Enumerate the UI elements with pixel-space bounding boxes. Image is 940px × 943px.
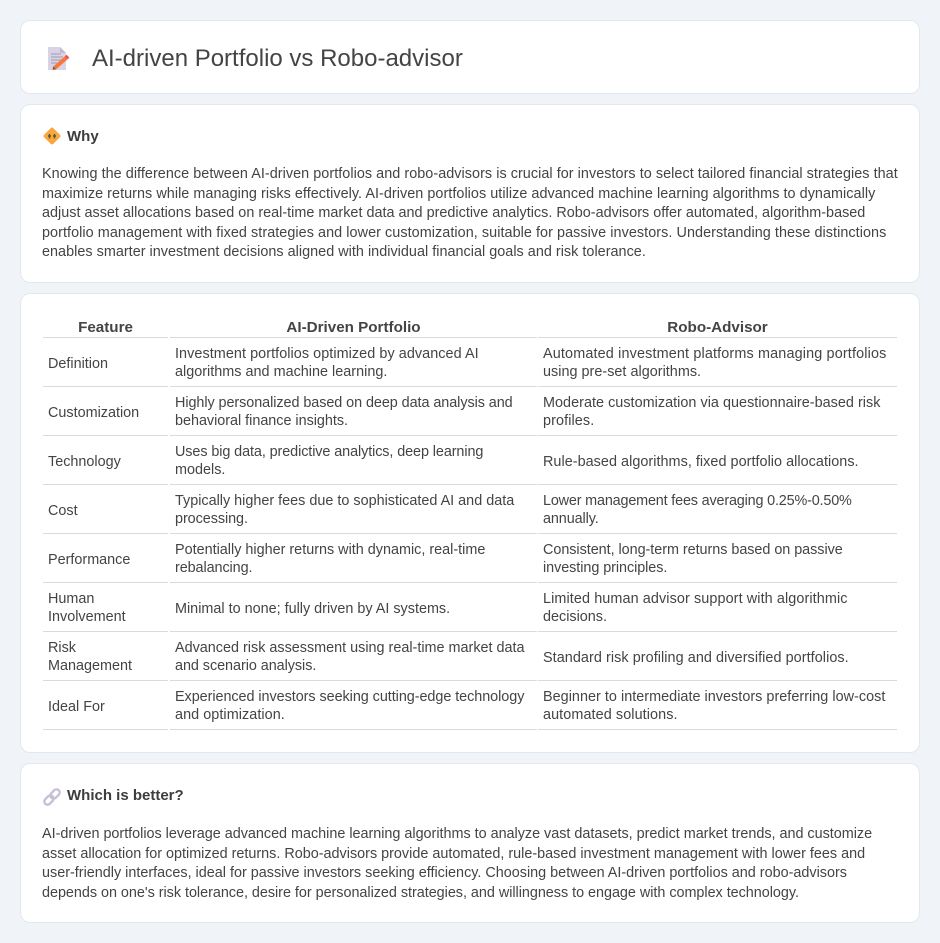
row: cost: Lower management fees averaging 0.25%-0.50% [543, 493, 852, 509]
row: ideal for: Experienced investors seeking cutting-edge technology [175, 689, 524, 705]
row: technology: Rule-based algorithms, fixed portfolio allocations. [543, 454, 859, 470]
row: performance: Potentially higher returns with dynamic, real-time [175, 542, 485, 558]
table header: AI-driven portfolio: AI-Driven Portfolio [286, 318, 421, 336]
icon: link [43, 788, 61, 806]
row: ideal for: automated solutions. [543, 707, 678, 723]
row: risk management: Advanced risk assessment using real-time market data [175, 640, 525, 656]
text block: why: portfolio management with fixed strategies and lower customization, suitable for passive investors. Understanding these distinctions [42, 224, 886, 240]
row: technology: Technology [48, 454, 121, 470]
text block: why: Knowing the difference between AI-driven portfolios and robo-advisors is crucial for investors to select tailored financial strategies that [42, 166, 898, 182]
row: human involvement: Minimal to none; fully driven by AI systems. [175, 601, 450, 617]
row: customization: profiles. [543, 413, 594, 429]
row: definition: Automated investment platforms managing portfolios [543, 346, 886, 362]
row: customization: Highly personalized based on deep data analysis and [175, 395, 513, 411]
text block: which is better [42, 826, 872, 900]
text block: why: adjust asset allocations based on real-time market data and predictive analytics. Robo-advisors offer automated, algorithm-based [42, 205, 865, 221]
text block: which is better: user-friendly interfaces, ideal for passive investors seeking efficiency. Choosing between AI-driven portfolios and robo-advisors [42, 865, 847, 881]
heading: which is better: Which is better? [67, 787, 184, 804]
row: cost: annually. [543, 511, 599, 527]
icon: memo with pencil [48, 47, 70, 70]
text block: why [42, 166, 898, 260]
row: performance: Performance [48, 552, 130, 568]
row: definition: Definition [48, 356, 108, 372]
row: cost: Cost [48, 503, 78, 519]
row: customization: behavioral finance insights. [175, 413, 348, 429]
row: performance: investing principles. [543, 560, 667, 576]
row: customization: Customization [48, 405, 139, 421]
row: customization [48, 395, 880, 429]
row: performance [48, 542, 843, 576]
row: risk management [48, 640, 849, 674]
row: definition: using pre-set algorithms. [543, 364, 701, 380]
text block: which is better: AI-driven portfolios leverage advanced machine learning algorithms to analyze vast datasets, predict market trends, and customize [42, 826, 872, 842]
row: risk management: Risk [48, 640, 76, 656]
row: ideal for: Ideal For [48, 699, 105, 715]
row: risk management: and scenario analysis. [175, 658, 316, 674]
text block: which is better: asset allocation for optimized returns. Robo-advisors provide automated, rule-based investment management with lower fees and [42, 846, 865, 862]
row: ideal for [48, 689, 886, 723]
panel: header [20, 20, 920, 94]
row: technology: models. [175, 462, 225, 478]
text block: why: maximize returns while managing risks effectively. AI-driven portfolios utilize advanced machine learning algorithms to dynamically [42, 186, 875, 202]
row: human involvement [48, 591, 848, 625]
row: human involvement: Involvement [48, 609, 126, 625]
heading: why: Why [67, 128, 99, 145]
table header: feature: Feature [78, 318, 133, 336]
row: definition [48, 346, 886, 380]
row: human involvement: decisions. [543, 609, 607, 625]
row: technology: Uses big data, predictive analytics, deep learning [175, 444, 483, 460]
panel: comparison table [20, 293, 920, 753]
row: definition: algorithms and machine learning. [175, 364, 387, 380]
row: risk management: Management [48, 658, 132, 674]
row: cost [48, 493, 852, 527]
title: AI-driven Portfolio vs Robo-advisor [92, 45, 463, 72]
text block: why: enables smarter investment decisions aligned with individual financial goals and risk tolerance. [42, 244, 646, 260]
icon: warning diamond [44, 128, 60, 144]
row: performance: rebalancing. [175, 560, 252, 576]
row: customization: Moderate customization via questionnaire-based risk [543, 395, 880, 411]
table header: robo-advisor: Robo-Advisor [667, 318, 768, 336]
row: human involvement: Limited human advisor support with algorithmic [543, 591, 848, 607]
text block: which is better: depends on one's risk tolerance, desire for personalized strategies, and willingness to engage with complex technology. [42, 884, 799, 900]
row: performance: Consistent, long-term returns based on passive [543, 542, 843, 558]
row: human involvement: Human [48, 591, 94, 607]
row: cost: processing. [175, 511, 248, 527]
panel: which is better [20, 763, 920, 923]
row: ideal for: Beginner to intermediate investors preferring low-cost [543, 689, 885, 705]
row: cost: Typically higher fees due to sophisticated AI and data [175, 493, 514, 509]
panel: why [20, 104, 920, 283]
row: risk management: Standard risk profiling and diversified portfolios. [543, 650, 849, 666]
row: definition: Investment portfolios optimized by advanced AI [175, 346, 479, 362]
row: technology [48, 444, 859, 478]
row: ideal for: and optimization. [175, 707, 285, 723]
